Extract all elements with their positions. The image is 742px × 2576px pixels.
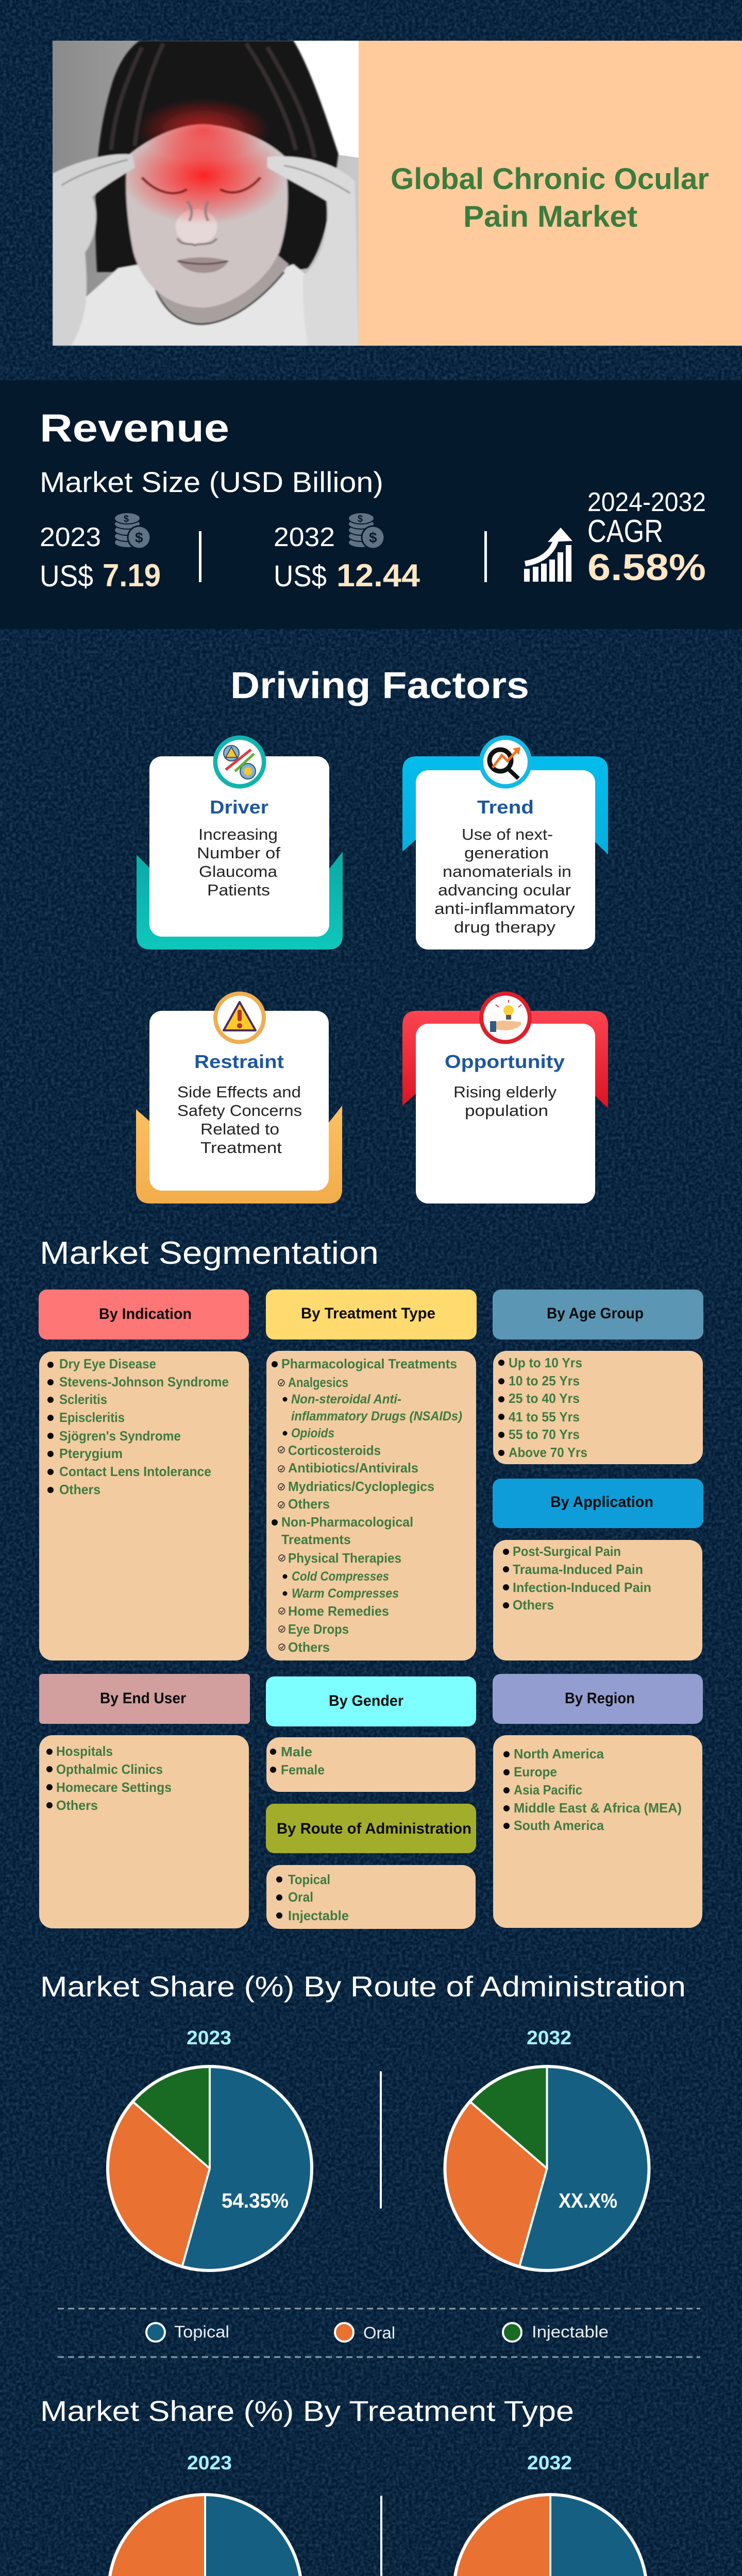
revenue band [0, 380, 742, 629]
year label 2023: 2023 [187, 2027, 231, 2049]
panel: by end user [39, 1674, 250, 1928]
list: 25 to 40 Yrs [509, 1391, 580, 1406]
list: Male [281, 1744, 312, 1759]
header [266, 1676, 476, 1726]
divider [484, 531, 487, 582]
list: Physical Therapies [288, 1550, 401, 1566]
pie chart: treatment 2023 [109, 2495, 301, 2576]
list: Analgesics [288, 1375, 348, 1390]
list [493, 1540, 702, 1660]
list: Non-Pharmacological [281, 1514, 413, 1530]
list: Scleritis [59, 1392, 107, 1407]
opportunity text [453, 1083, 557, 1120]
CAGR block: 2024-2032 [587, 487, 706, 517]
pie chart: treatment 2032 [454, 2495, 647, 2576]
list: Others [59, 1482, 100, 1497]
list: Contact Lens Intolerance [59, 1464, 211, 1479]
list: Oral [288, 1889, 313, 1905]
header [39, 1674, 250, 1724]
list: Post-Surgical Pain [513, 1544, 621, 1559]
list [266, 1865, 476, 1929]
header: By Gender [329, 1692, 403, 1709]
list: Antibiotics/Antivirals [288, 1460, 418, 1476]
header [493, 1479, 703, 1528]
list: Others [56, 1798, 98, 1813]
icon: restraint warning [213, 991, 266, 1044]
trend title: Trend [477, 796, 534, 818]
icon: opportunity hand and bulb [479, 991, 532, 1044]
pie chart: route 2032 [445, 2066, 649, 2270]
list: Episcleritis [59, 1410, 125, 1425]
list [266, 1351, 476, 1660]
driver text [197, 825, 280, 899]
list: inflammatory Drugs (NSAIDs) [291, 1409, 462, 1423]
header [39, 1290, 249, 1340]
restraint text: Treatment [200, 1139, 282, 1157]
year label 2032: 2032 [527, 2452, 572, 2474]
legend: route of administration: Injectable [532, 2323, 609, 2341]
list: Injectable [288, 1908, 349, 1923]
2032 value: 2032 [274, 522, 335, 552]
restraint text: Related to [200, 1120, 279, 1138]
list [493, 1351, 703, 1464]
header: By End User [100, 1690, 186, 1707]
icon: coins 2032: $ [369, 530, 377, 546]
driver title: Driver [210, 796, 268, 818]
panel: by treatment type [266, 1290, 477, 1660]
CAGR block [587, 487, 706, 588]
trend text: Use of next- [462, 825, 553, 843]
driver text: Increasing [198, 825, 278, 843]
2023 value [40, 522, 161, 594]
list [39, 1735, 249, 1928]
legend: route of administration [146, 2323, 609, 2342]
chart divider [380, 2071, 382, 2209]
2023 value: US$ [40, 560, 93, 593]
2032 value: 12.44 [336, 558, 420, 594]
driver text: Patients [207, 881, 270, 899]
list: Mydriatics/Cycloplegics [288, 1479, 434, 1494]
list: Dry Eye Disease [59, 1356, 156, 1371]
list [266, 1737, 476, 1792]
value label: 54.35% [222, 2190, 289, 2212]
panel: by indication [39, 1290, 249, 1660]
restraint text: Side Effects and [177, 1083, 301, 1101]
opportunity title: Opportunity [445, 1051, 565, 1072]
list: 10 to 25 Yrs [509, 1373, 580, 1388]
legend: route of administration: Oral [363, 2324, 395, 2342]
header [493, 1290, 703, 1340]
heading: driving factors: Driving Factors [230, 665, 529, 706]
header: By Route of Administration [277, 1820, 471, 1837]
trend text: anti-inflammatory [434, 900, 576, 918]
title text [391, 162, 709, 233]
panel: driver card [137, 736, 343, 950]
revenue heading: Revenue [40, 406, 229, 450]
chart divider [380, 2496, 382, 2576]
list: Infection-Induced Pain [513, 1580, 651, 1595]
2023 value: 7.19 [103, 558, 161, 594]
list: Eye Drops [288, 1621, 349, 1637]
list: Stevens-Johnson Syndrome [59, 1374, 229, 1389]
heading: share by route of administration: Market Share (%) By Route of Administration [40, 1970, 686, 2003]
panel: by route of administration [266, 1804, 476, 1929]
list: Topical [288, 1872, 330, 1887]
value label: XX.X% [559, 2190, 617, 2212]
trend text: generation [464, 844, 549, 862]
trend text: nanomaterials in [443, 862, 571, 880]
icon: coins 2023: $ [124, 514, 129, 524]
heading: share by treatment type: Market Share (%) By Treatment Type [40, 2395, 574, 2427]
restraint title: Restraint [194, 1051, 284, 1072]
list: North America [514, 1746, 604, 1761]
year label 2023: 2023 [187, 2452, 232, 2474]
icon: driver [213, 736, 266, 788]
list: Sjögren's Syndrome [59, 1428, 181, 1444]
icon: growth chart arrow [524, 528, 572, 582]
list: Warm Compresses [292, 1586, 399, 1601]
list: Opioids [291, 1426, 334, 1440]
2032 value [274, 522, 420, 594]
list: Pterygium [59, 1446, 123, 1461]
pie chart: route 2023 [108, 2066, 312, 2270]
list: Others [513, 1597, 554, 1613]
driver text: Number of [197, 844, 280, 862]
opportunity text: population [465, 1101, 548, 1120]
hero photo: woman with eye pain [53, 41, 359, 346]
list: Cold Compresses [292, 1569, 389, 1584]
title text: Pain Market [463, 200, 637, 233]
list: Treatments [281, 1532, 351, 1547]
restraint text [177, 1083, 302, 1157]
header [493, 1674, 703, 1724]
list: 55 to 70 Yrs [509, 1427, 580, 1442]
icon: trend [479, 736, 532, 788]
header [266, 1804, 476, 1853]
2032 value: US$ [274, 560, 327, 593]
list: Corticosteroids [288, 1443, 381, 1458]
list: Middle East & Africa (MEA) [514, 1800, 682, 1816]
list: South America [514, 1818, 604, 1833]
CAGR block: CAGR [587, 514, 663, 549]
title text: Global Chronic Ocular [391, 162, 709, 196]
list: Above 70 Yrs [509, 1445, 587, 1460]
list: Homecare Settings [56, 1780, 172, 1795]
list: Europe [514, 1764, 557, 1780]
list: Trauma-Induced Pain [513, 1562, 643, 1577]
CAGR block: 6.58% [587, 547, 706, 588]
panel: restraint card [136, 991, 342, 1204]
heading: market segmentation: Market Segmentation [40, 1235, 379, 1271]
header [266, 1290, 477, 1340]
panel: by age group [493, 1290, 703, 1464]
driver text: Glaucoma [199, 862, 278, 880]
header: By Treatment Type [301, 1305, 435, 1322]
list: Up to 10 Yrs [509, 1355, 582, 1370]
list [39, 1351, 249, 1660]
icon: coins 2032: $ [358, 514, 363, 524]
list: Asia Pacific [514, 1782, 582, 1798]
trend text: drug therapy [454, 918, 556, 936]
opportunity text: Rising elderly [453, 1083, 557, 1101]
list: Non-steroidal Anti- [291, 1392, 401, 1406]
title panel [359, 41, 742, 346]
market size subtitle: Market Size (USD Billion) [40, 466, 383, 498]
header: By Region [565, 1690, 635, 1707]
list: Hospitals [56, 1743, 113, 1759]
list: Others [288, 1639, 330, 1655]
list: 41 to 55 Yrs [509, 1409, 580, 1425]
list: Home Remedies [288, 1603, 389, 1619]
panel: by application [493, 1479, 703, 1660]
icon: coins 2032 [348, 513, 384, 549]
legend: route of administration: Topical [174, 2323, 229, 2341]
restraint text: Safety Concerns [177, 1101, 302, 1120]
panel: by gender [266, 1676, 476, 1792]
icon: coins 2023 [114, 513, 150, 549]
trend text: advancing ocular [438, 881, 571, 899]
list: Others [288, 1496, 330, 1512]
panel: opportunity card [402, 991, 608, 1204]
list [493, 1735, 702, 1928]
list: Opthalmic Clinics [56, 1761, 163, 1777]
panel: by region [493, 1674, 703, 1928]
panel: trend card [402, 736, 608, 950]
header: By Indication [99, 1306, 192, 1323]
divider [199, 531, 201, 582]
list: Female [281, 1762, 325, 1777]
icon: coins 2023: $ [135, 530, 143, 546]
trend text [434, 825, 576, 936]
header: By Application [550, 1494, 653, 1511]
header: By Age Group [547, 1305, 644, 1322]
year label 2032: 2032 [527, 2027, 571, 2049]
2023 value: 2023 [40, 522, 101, 552]
list: Pharmacological Treatments [281, 1356, 457, 1371]
